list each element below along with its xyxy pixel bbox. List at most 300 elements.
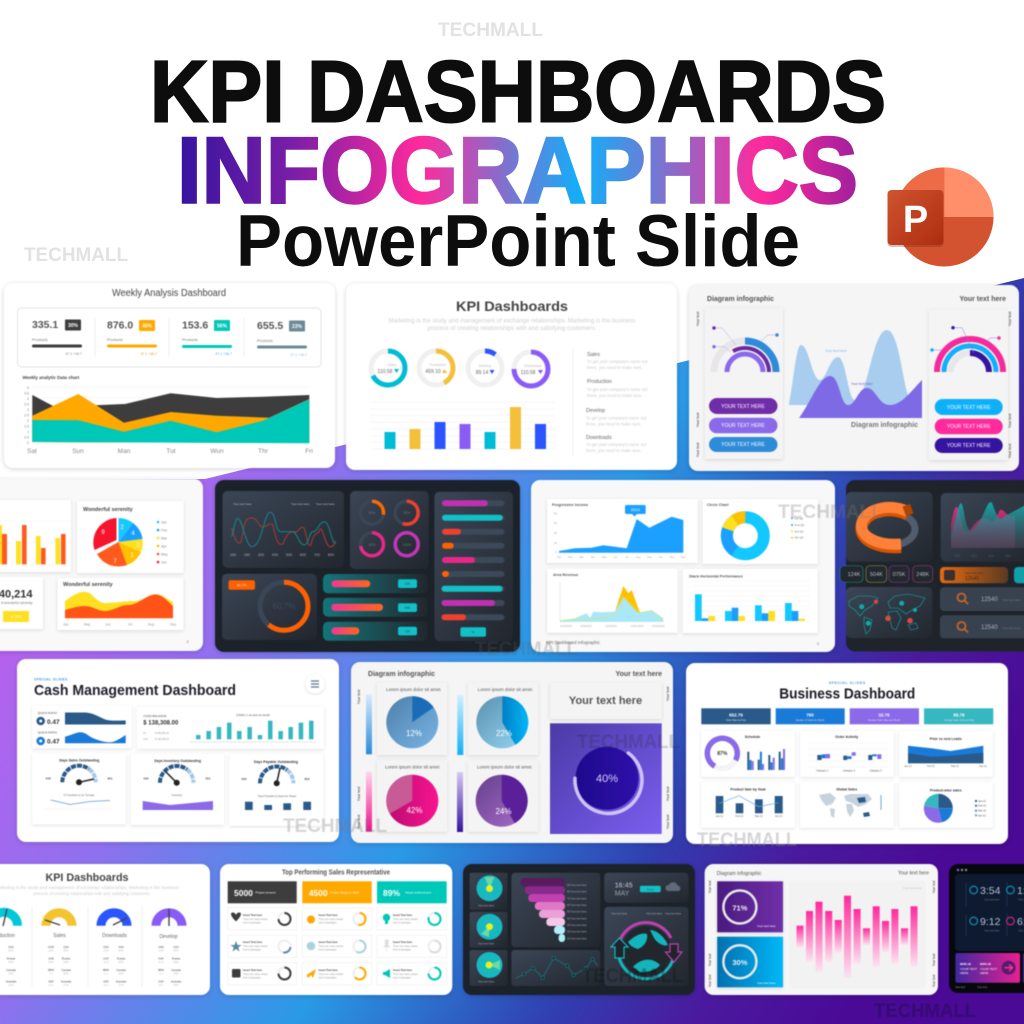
KPI tiles: Number of Orders by Month (796, 719, 825, 722)
card: pie chart: 2 (120, 525, 124, 531)
icon: PowerPoint logo: P (903, 199, 928, 241)
area chart: weekly data: Thr (258, 448, 269, 455)
intro text: process of creating relationships with and satisfying customers. (428, 326, 597, 332)
country tables: 40% (173, 948, 179, 952)
title: Infographics: INFOGRAPHICS (177, 118, 858, 222)
card: Area Revenue chart (547, 569, 678, 633)
intro text (0, 885, 179, 896)
card: pie chart: Jan (161, 520, 167, 524)
side labels: Your text (932, 974, 936, 987)
KPI row box: 335.1 (32, 319, 58, 331)
panel: dark 3D ring dashboard (840, 480, 1024, 652)
card: cash balance and bars: $ 345,556.40 (155, 732, 170, 735)
title block (150, 44, 886, 282)
card: prior vs new leads (899, 731, 993, 777)
side labels: Your text (696, 442, 700, 457)
blue ring card 30%: Your text here (757, 981, 776, 985)
area chart: weekly data (24, 386, 313, 455)
pie card 24%: Lorem ipsum dolor sit amet. (477, 764, 533, 770)
purple card: 40% ring: 40% (596, 773, 618, 785)
country tables: Canada (171, 968, 181, 972)
intro text: process of creating relationships with and satisfying customers. (34, 891, 150, 896)
time and weather card: Today (647, 887, 655, 891)
panel: Diagram infographic with pies (351, 662, 673, 843)
card: area chart: Wonderful serenity (63, 582, 114, 588)
header tile: target achievement: 89% (383, 888, 400, 898)
card: area chart: Jun (105, 622, 111, 626)
card: progress bars (434, 492, 513, 641)
card: quick ratio: QUICK RATIO (38, 711, 58, 715)
card: pie chart: 2 (137, 543, 141, 549)
purple ring card 71% (717, 881, 783, 932)
card: pie chart: Wonderful serenity (83, 507, 134, 513)
stat chips: 124K (848, 572, 861, 578)
country tables: USA (173, 945, 179, 949)
icons: heart, apple, bulb, star, clock, pin, calendar, plane, megaphone (230, 912, 390, 978)
chart label: Weekly analytic Data chart (22, 375, 80, 380)
orange stat pill: 12540 (965, 576, 979, 582)
list: Sales, Production, Develop, Downloads: there, you need to make sure. (586, 422, 642, 426)
text box: Your text here (569, 695, 642, 707)
donut labels: 459.10 (425, 369, 441, 375)
page number: 2 (186, 639, 189, 644)
list: Sales, Production, Develop, Downloads: there, you need to make sure. (586, 448, 642, 453)
list: Sales, Production, Develop, Downloads: Develop (586, 408, 605, 414)
KPI row box: 23% (292, 324, 303, 330)
KPI tiles: 760 (806, 712, 814, 718)
country tables: UAE (48, 956, 54, 960)
icon: PowerPoint logo (888, 168, 994, 266)
card: Progressive Income area chart: 40 (554, 531, 557, 535)
pie card 22% (468, 682, 538, 755)
card: cash balance and bars (137, 707, 324, 749)
time and weather card (604, 873, 688, 903)
card: days inventory gauge: 545 (143, 776, 149, 780)
pie card 24%: 24% (495, 807, 512, 816)
panel: Business Dashboard (686, 663, 1008, 844)
footer text: KPI Dashboard Infographic (546, 640, 601, 645)
heading: Top Performing Sales Representative (282, 870, 390, 876)
card: Progressive Income area chart: 60 (554, 521, 557, 525)
card: area chart: Jul (128, 622, 132, 626)
country tables: UAE (158, 945, 164, 949)
card: Progressive Income area chart: Jun (613, 555, 618, 559)
card: days inventory gauge: 551 (205, 776, 211, 780)
card: line chart: 400 (272, 553, 278, 557)
card: line chart: 280 (244, 553, 250, 557)
heading right: Your text here (959, 296, 1006, 303)
card: four ring gauges: 35% (403, 511, 410, 515)
header tile: project amount: Project amount (256, 890, 276, 894)
card: large ring 60,7%: 60,7% (237, 584, 247, 588)
area chart: weekly data: Wun (210, 448, 224, 455)
card: right gauge: YOUR TEXT HERE (947, 405, 991, 411)
clock card: Your text here (984, 898, 1000, 902)
card: spiky area chart: 180 (954, 554, 960, 558)
card: Progressive Income area chart: Dec (681, 555, 686, 559)
heading left: Diagram infographic (707, 296, 774, 303)
country tables: 35% (173, 960, 179, 964)
heading right: Your text here (898, 870, 929, 876)
panel: dark dashboard with funnel and globe (463, 864, 695, 995)
globe card (604, 907, 688, 986)
heading: KPI Dashboards (46, 872, 128, 884)
left stat cards (470, 873, 508, 986)
card: right gauge: YOUR TEXT HERE (947, 424, 991, 430)
list: Sales, Production, Develop, Downloads: Sales (587, 352, 600, 358)
watermark: globe card: TECHMALL (582, 966, 683, 987)
card: product sale by goal (701, 782, 795, 828)
header tile: project amount (228, 881, 297, 903)
card: cash balance and bars: CLP (143, 738, 148, 741)
left stat cards: Your text here (478, 980, 495, 984)
panel: Wonderful serenity charts (0, 479, 203, 651)
gauge needles (3, 909, 169, 926)
item descriptions: There are many variant (243, 918, 268, 921)
card: days inventory gauge: Days Inventory Outstanding (154, 759, 201, 763)
area chart: weekly data: 0 (27, 441, 29, 445)
side labels: Your text (708, 953, 712, 966)
list: Sales, Production, Develop, Downloads: there, you need to make sure. (587, 393, 643, 398)
KPI row box: 876.0 (107, 320, 133, 332)
donut labels (378, 363, 543, 376)
funnel card: 90 Your text here (567, 883, 587, 887)
country tables (6, 945, 182, 987)
country tables: Russia (62, 956, 71, 960)
card: order activity: Category 3 (870, 770, 882, 772)
card: line chart: Your text here (233, 502, 252, 506)
watermark: business panel: TECHMALL (697, 830, 797, 851)
icon: menu button (306, 674, 324, 694)
item descriptions: There are many variant (243, 973, 268, 976)
intro text: Marketing is the study and management of exchange relationships. Marketing is the business (388, 318, 636, 324)
bar chart (370, 402, 555, 449)
donut labels: Production (430, 363, 446, 367)
card: line chart: 180 (230, 553, 236, 557)
card: days sales gauge: 645 (46, 776, 51, 780)
gauge names (0, 933, 178, 940)
pie card 12% (377, 682, 447, 755)
watermark: center: TECHMALL (475, 639, 578, 660)
area chart: weekly data: Tut (166, 448, 176, 455)
line chart card (511, 950, 600, 986)
KPI row box: 655.5 (257, 320, 283, 332)
country tables: USA (63, 945, 69, 949)
funnel card: 50 Your text here (567, 910, 587, 914)
funnel card: 70 Your text here (567, 896, 587, 900)
card: line chart: 500 (286, 553, 292, 557)
pie card 12%: 12% (406, 729, 422, 738)
watermark: across dark panel right: TECHMALL (778, 502, 883, 523)
item descriptions: There are many variant (393, 945, 418, 948)
country tables: 12.3 (158, 960, 164, 964)
area chart: weekly data: 1.5 (24, 424, 29, 428)
funnel card: 80 Your text here (567, 890, 587, 894)
card: Circle Chart donut: 4th Qtr (794, 536, 804, 540)
card: product sale by goal: Apr-21 (775, 815, 783, 818)
KPI tiles: 65.76 (953, 712, 965, 718)
card: Progressive Income area chart: Aug (636, 555, 641, 559)
card: quick ratio: 0.47 (47, 719, 60, 726)
country tables: 17% (118, 983, 124, 987)
card: Progressive Income area chart: 80 (554, 512, 557, 516)
card: big number: ▲ 20% (10, 615, 22, 619)
card: Progressive Income area chart: Oct (659, 555, 663, 559)
eyebrow: SPECIAL SLIDES (829, 681, 866, 685)
side labels: Your text (1008, 413, 1012, 428)
stat chips: 504K (870, 572, 883, 578)
gauge names: Downloads (102, 933, 127, 939)
clock card: 3:54 (980, 885, 1001, 897)
card: Area Revenue chart: Area Revenue (553, 573, 578, 577)
country tables: 14.1 (158, 983, 164, 987)
card: cash balance and bars: Px (143, 732, 147, 735)
heading left: Diagram infographic (717, 871, 762, 877)
panel: Weekly Analysis Dashboard (4, 283, 335, 468)
donut gauges (371, 351, 548, 386)
card: product-wise sales pie: Jan-21 (978, 799, 986, 803)
card: large ring 60,7%: 60,7% (273, 602, 295, 611)
card: schedule donut and bars: Schedule (745, 735, 760, 739)
gradient stat card with arrow: $965.18 (960, 962, 971, 966)
panel: Cash Management Dashboard (17, 659, 339, 842)
stat chips: 075K (893, 572, 906, 578)
card: spiky area chart (941, 493, 1024, 562)
country tables: Australia (6, 980, 17, 984)
pie card 22%: Lorem ipsum dolor sit amet. (478, 687, 533, 692)
area chart: weekly data: 3 (27, 408, 29, 412)
pie card 24% (468, 760, 538, 832)
card: prior vs new leads: Jan-21 (904, 765, 912, 768)
watermark: bottom right: TECHMALL (874, 1001, 976, 1022)
KPI row box: Products (32, 337, 48, 342)
country tables: 12.3 (103, 960, 109, 964)
item titles: Insert Text here (393, 913, 413, 917)
area chart: weekly data: 5 (27, 386, 29, 390)
card: left gauge: YOUR TEXT HERE (721, 404, 766, 410)
card: Progressive Income area chart: Nov (670, 555, 675, 559)
card: area chart: Aug (148, 622, 154, 626)
top dots (957, 869, 967, 871)
KPI tiles (701, 708, 993, 724)
purple ring card 71%: Your text here (757, 924, 776, 928)
KPI row box: 56% (217, 324, 228, 330)
country tables: 35% (118, 960, 124, 964)
funnel card: 30 Your text here (567, 923, 587, 927)
card: pie chart: Apr (161, 544, 167, 548)
card: Progressive Income area chart: 0 (555, 550, 557, 554)
card: quick ratio: 0.47 (47, 738, 60, 746)
list: Sales, Production, Develop, Downloads: there, you need to make sure. (587, 365, 643, 370)
card: Progressive Income area chart (547, 499, 698, 563)
list: Sales, Production, Develop, Downloads (573, 349, 648, 456)
blue ring card 30%: 30% (732, 958, 748, 967)
KPI row box: Products (257, 338, 273, 343)
side labels: Your text (666, 786, 670, 801)
item descriptions: kind of passages (243, 922, 262, 924)
card: Progressive Income area chart: Sep (647, 555, 652, 559)
gradient side bars (366, 694, 463, 832)
country tables: BPM (48, 968, 55, 972)
card: pie chart (77, 501, 184, 573)
card: prior vs new leads: Feb-21 (927, 765, 936, 768)
country tables: 1.4 (49, 972, 53, 976)
panel: navy clock dashboard (949, 864, 1024, 993)
card: Circle Chart donut (703, 499, 818, 564)
country tables: Australia (61, 980, 72, 984)
dividers (32, 906, 142, 987)
funnel card: 60 Your text here (567, 903, 587, 907)
area chart: weekly data: 2 (27, 419, 29, 423)
card: bar chart (0, 500, 71, 572)
side labels: Your text (666, 686, 670, 701)
funnel card (511, 873, 600, 947)
pie card 42% (377, 760, 447, 832)
item descriptions: kind of passages (393, 976, 412, 980)
country tables: GCR (48, 945, 54, 949)
card: Area Revenue chart: 9/22/2023 (560, 624, 572, 628)
card: order activity (800, 731, 894, 777)
card: Progressive Income area chart: Jan (557, 555, 562, 559)
title: PowerPoint Slide: PowerPoint Slide (236, 201, 800, 282)
KPI tiles: Average Order Value per Month (868, 719, 901, 722)
gradient stat card with arrow: HERE (960, 971, 968, 975)
card: pie chart: 1 (130, 553, 134, 559)
card: Circle Chart donut: 2nd Qtr (794, 523, 805, 527)
half gauges (0, 912, 182, 926)
watermark: cash panel: TECHMALL (283, 816, 387, 837)
donut labels: 110.58 (378, 369, 393, 375)
KPI tiles: Order Rate by Price (726, 719, 747, 722)
country tables: 30% (8, 948, 14, 952)
watermark: left: TECHMALL (24, 245, 128, 266)
card: right gauge (929, 310, 1008, 460)
country tables: Russia (117, 956, 126, 960)
country tables: CHF (158, 980, 164, 984)
side labels: Your text (932, 953, 936, 966)
card: global sales map (800, 782, 894, 828)
card: pie chart: Mar (161, 536, 168, 540)
card: cash balance and bars: $ 138,308.00 (155, 738, 170, 741)
orange stat pill (940, 567, 1024, 583)
country tables: Canada (61, 968, 71, 972)
card: order activity: Category 1 (816, 770, 829, 772)
card: line chart: 300 (258, 553, 264, 557)
list: Sales, Production, Develop, Downloads: Downloads (586, 435, 612, 441)
item descriptions: There are many variant (243, 945, 268, 948)
side labels: Your text (357, 786, 361, 801)
card: line chart (222, 491, 344, 568)
pie card 22%: 22% (496, 729, 512, 738)
watermark: top: TECHMALL (438, 20, 543, 41)
item descriptions: kind of passages (393, 922, 412, 924)
card: four ring gauges: 20% (368, 511, 376, 515)
card: Progressive Income area chart: Jul (625, 555, 629, 559)
card: gradient bars with badges: 20K (405, 582, 411, 586)
country tables: 15% (8, 983, 14, 987)
item descriptions: kind of passages (318, 976, 337, 980)
KPI row box: 30% (68, 323, 79, 329)
card: Stack Horizontal Performance bars (683, 569, 818, 633)
country tables: 30% (48, 960, 54, 964)
intro text: Marketing is the study and management of exchange relationships. Marketing is the business (0, 885, 179, 890)
KPI tiles: 652.76 (729, 712, 743, 718)
panel: dark dashboard with lines and bars (215, 480, 520, 652)
background gradient band (0, 278, 1024, 1024)
card: global sales map: Global Sales (836, 788, 857, 792)
orange stat pill: Your text here (965, 571, 984, 575)
pie card 42%: Lorem ipsum dolor sit amet. (385, 764, 441, 770)
footer labels (955, 985, 987, 989)
gradient stat card with arrow: HERE (980, 971, 988, 975)
country tables: 11% (48, 948, 54, 952)
side labels: Your text (708, 974, 712, 987)
eyebrow: SPECIAL SLIDES (34, 678, 68, 682)
list: Sales, Production, Develop, Downloads: To get your company's name out (586, 442, 647, 447)
country tables: 35% (173, 972, 179, 976)
panel: KPI Dashboards gauges (0, 864, 210, 995)
country tables: CDF (103, 980, 109, 984)
country tables: 40% (173, 983, 179, 987)
KPI row box: 47.1 +36.7 (215, 352, 232, 356)
card: big number (0, 577, 43, 629)
KPI row box: 47.1 +36.7 (140, 352, 157, 356)
country tables: CHF (158, 956, 164, 960)
item titles: Insert Text here (318, 940, 338, 944)
card: product-wise sales pie: Feb-21 (978, 804, 987, 808)
progress rings (278, 913, 440, 980)
card: quick ratio (32, 706, 132, 748)
card: line chart: Your text here (291, 502, 310, 506)
panel: Diagram infographic with pink bars (705, 864, 938, 995)
clock card (955, 874, 1024, 951)
country tables: Canada (116, 968, 126, 972)
country tables: 11% (158, 948, 164, 952)
card: spiky area chart: 400 (1005, 554, 1011, 558)
item titles: Insert Text here (393, 940, 413, 944)
country tables: 17% (63, 983, 69, 987)
card: left gauge: YOUR TEXT HERE (721, 423, 766, 429)
country tables: 35% (63, 948, 69, 952)
card: quick ratio: QUICK RATIO (38, 730, 58, 734)
card: large ring 60,7% (222, 574, 317, 640)
stat row 2: Your text here (1002, 626, 1021, 630)
card: Progressive Income area chart: Feb (568, 555, 573, 559)
funnel card: 10 Your text here (567, 936, 587, 940)
card: days payable gauge: 653 (304, 777, 310, 781)
heading: KPI Dashboards (456, 298, 568, 314)
card: Stack Horizontal Performance bars: Stack Horizontal Performance (689, 574, 743, 578)
card: product-wise sales pie: Apr-21 (978, 813, 986, 817)
stat chips: 248K (916, 572, 929, 578)
header tile: project target: Project Target in 2021 (330, 890, 359, 894)
area chart: weekly data: 4.5 (24, 392, 29, 396)
stat row 1 (940, 587, 1024, 611)
card: product-wise sales pie: Mar-21 (978, 809, 987, 813)
KPI row box: Products (182, 337, 198, 342)
footer labels: Your text (977, 985, 987, 989)
card: line chart: 700 (314, 553, 320, 557)
heading: Cash Management Dashboard (34, 682, 236, 699)
item descriptions: There are many variant (393, 918, 418, 921)
donut labels: Downloads (524, 364, 542, 368)
card: world map (846, 587, 932, 638)
gradient stat card with arrow: YOUR TEXT (980, 967, 997, 971)
card: Area Revenue chart: 10/9/2023 (580, 624, 592, 628)
card: product sale by goal: Feb-21 (736, 815, 744, 818)
time and weather card: MAY (615, 890, 630, 898)
KPI row box: 153.6 (182, 320, 208, 332)
